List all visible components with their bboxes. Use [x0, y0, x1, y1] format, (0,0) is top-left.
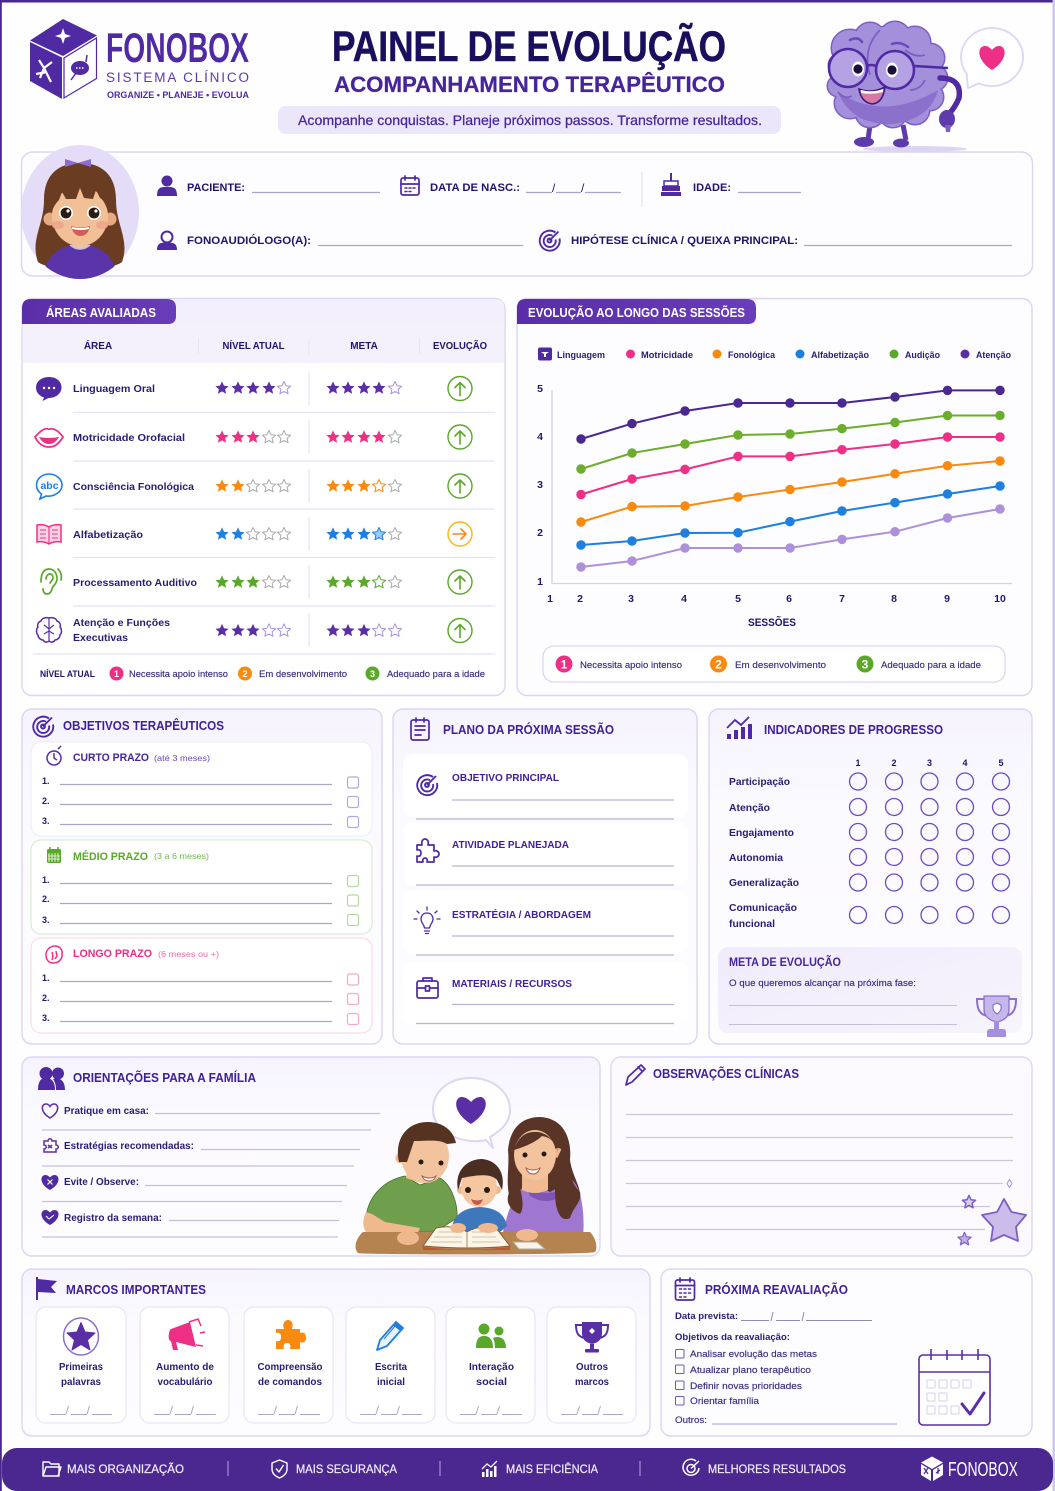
tagline: sistema clínico: SISTEMA CLÍNICO [106, 70, 249, 85]
icon: heart with pulse [41, 1210, 59, 1225]
legend: nível atual [40, 666, 485, 680]
callout: meta de evolução: O que queremos alcançar na próxima fase: [729, 978, 916, 989]
title: PAINEL DE EVOLUÇÃO [332, 23, 726, 71]
chart legend: Audição [905, 350, 940, 361]
row: linguagem oral [36, 376, 472, 401]
card: compreensão de comandos: de comandos [258, 1377, 322, 1388]
tagline pill: Acompanhe conquistas. Planeje próximos passos. Transforme resultados. [298, 112, 762, 128]
item: melhores resultados: MELHORES RESULTADOS [708, 1462, 846, 1476]
rating rows: Participação [729, 776, 790, 788]
card: médio prazo [31, 840, 372, 934]
icon: abc bubble [36, 474, 62, 499]
writing lines [626, 1114, 1013, 1230]
book [423, 1227, 510, 1250]
card: interação social: social [476, 1377, 507, 1388]
line chart: 1 [547, 593, 553, 605]
icon: abc bubble: abc [40, 480, 59, 492]
line chart: 7 [839, 593, 845, 605]
legend: nível atual: Adequado para a idade [387, 669, 485, 680]
card: curto prazo: (até 3 meses) [154, 753, 210, 763]
scale numbers: 4 [962, 758, 968, 768]
icon: calendar with check [919, 1349, 990, 1425]
card: interação social [446, 1307, 535, 1423]
child [452, 1159, 507, 1232]
line chart: 4 [537, 431, 543, 443]
field: data de nascimento: / [552, 181, 556, 195]
logo: Fonobox [30, 19, 250, 100]
series: audição [581, 416, 1000, 469]
chart legend: Alfabetização [811, 350, 869, 361]
checklist: Atualizar plano terapêutico [690, 1365, 811, 1376]
panel: indicadores de progresso [709, 709, 1032, 1044]
heading: ORIENTAÇÕES PARA A FAMÍLIA [73, 1070, 256, 1085]
row: evite / observe: Evite / Observe: [64, 1177, 139, 1188]
card: curto prazo: CURTO PRAZO [73, 752, 149, 764]
icon: brain outline [36, 618, 62, 642]
callout: meta de evolução [718, 947, 1022, 1037]
field: paciente: PACIENTE: [187, 182, 245, 194]
series: alfabetização [581, 486, 1000, 545]
legend box: 2 [715, 658, 722, 672]
panel: patient data [21, 145, 1032, 283]
card: atividade planejada [403, 822, 688, 885]
card: outros marcos: marcos [575, 1377, 609, 1388]
field: data prevista: Data prevista: [675, 1311, 738, 1322]
legend box: 3 [862, 658, 869, 672]
heading: OBSERVAÇÕES CLÍNICAS [653, 1066, 799, 1081]
icon: cake [661, 173, 681, 196]
series: fonológica [581, 461, 1000, 522]
line chart: 3 [628, 593, 634, 605]
table header: META [350, 341, 378, 352]
series: atenção [581, 390, 1000, 439]
line chart: 5 [537, 383, 543, 395]
icon: people [38, 1067, 65, 1090]
panel: plano da próxima sessão [393, 709, 697, 1044]
row: estratégias recomendadas: Estratégias recomendadas: [64, 1141, 194, 1152]
scale numbers: 5 [998, 758, 1004, 768]
footer bar [2, 1448, 1053, 1491]
heading: OBJETIVOS TERAPÊUTICOS [63, 718, 224, 733]
line chart: 9 [944, 593, 950, 605]
icon: ear [41, 569, 61, 594]
tab heading: ÁREAS AVALIADAS [46, 305, 156, 320]
card: objetivo principal [403, 754, 688, 819]
table header: NÍVEL ATUAL [222, 339, 284, 352]
item: mais eficiência: MAIS EFICIÊNCIA [506, 1461, 598, 1476]
checklist: Analisar evolução das metas [690, 1349, 817, 1360]
heading: PLANO DA PRÓXIMA SESSÃO [443, 722, 614, 737]
card: compreensão de comandos: Compreensão [258, 1362, 322, 1373]
father [363, 1122, 457, 1243]
card: longo prazo: 1. [42, 973, 50, 983]
checklist [675, 1332, 897, 1426]
card: materiais [403, 961, 688, 1024]
icon: lips [35, 429, 63, 447]
legend box: 1 [561, 658, 568, 672]
item: mais segurança: MAIS SEGURANÇA [296, 1462, 397, 1476]
card: médio prazo: MÉDIO PRAZO [73, 850, 148, 863]
tab heading: EVOLUÇÃO AO LONGO DAS SESSÕES [528, 305, 745, 320]
line chart: 6 [786, 593, 792, 605]
subtitle: ACOMPANHAMENTO TERAPÊUTICO [334, 72, 725, 97]
mascot: brain with glasses [828, 22, 967, 152]
card: primeiras palavras: palavras [61, 1377, 101, 1388]
panel: áreas avaliadas [22, 298, 505, 696]
card: longo prazo: LONGO PRAZO [73, 948, 152, 960]
line chart: 5 [735, 593, 741, 605]
icon: cube [30, 19, 97, 99]
checklist: Outros: [675, 1415, 707, 1426]
legend box: Adequado para a idade [881, 660, 981, 671]
legend: nível atual: NÍVEL ATUAL [40, 669, 96, 679]
hands and paper [397, 1223, 545, 1249]
card: objetivo principal: OBJETIVO PRINCIPAL [452, 773, 559, 784]
card: interação social: Interação [469, 1362, 514, 1373]
chart legend: Linguagem [557, 350, 605, 361]
card: longo prazo: 3. [42, 1013, 50, 1023]
card: curto prazo: 3. [42, 816, 50, 826]
icon: calendar [401, 176, 419, 195]
icon: clipboard [411, 718, 429, 740]
icon: puzzle [44, 1139, 58, 1152]
row: pratique em casa: Pratique em casa: [64, 1106, 149, 1117]
table header: EVOLUÇÃO [433, 339, 487, 352]
chart legend: Motricidade [641, 350, 693, 361]
slogan: ORGANIZE • PLANEJE • EVOLUA [107, 90, 250, 100]
row: motricidade: Motricidade Orofacial [73, 432, 185, 444]
tab heading [22, 299, 176, 324]
row: consciência fonológica [36, 474, 472, 499]
field: data de nascimento: / [581, 181, 585, 195]
card: longo prazo [31, 938, 372, 1033]
scale numbers: 2 [891, 758, 897, 768]
icon: book [37, 525, 61, 544]
card: médio prazo: (3 a 6 meses) [154, 851, 209, 861]
legend: nível atual: Necessita apoio intenso [129, 669, 228, 680]
icon: target [540, 231, 560, 251]
scale numbers: 3 [927, 758, 932, 768]
panel: próxima reavaliação [661, 1269, 1032, 1436]
card: primeiras palavras [36, 1307, 126, 1423]
panel: objetivos terapêuticos [22, 709, 382, 1044]
row: linguagem oral: Linguagem Oral [73, 383, 155, 395]
chart legend [538, 348, 1011, 361]
tagline pill [278, 106, 781, 134]
card: outros marcos: Outros [576, 1362, 608, 1373]
row: registro da semana [41, 1210, 339, 1237]
card: compreensão de comandos [244, 1307, 333, 1423]
card: escrita inicial: Escrita [375, 1362, 407, 1373]
card: curto prazo: 1. [42, 776, 50, 786]
card: longo prazo: (6 meses ou +) [158, 949, 219, 959]
card: médio prazo: 3. [42, 915, 50, 925]
item: melhores resultados [683, 1459, 846, 1476]
wordmark: FONOBOX [106, 24, 249, 71]
heading: PRÓXIMA REAVALIAÇÃO [705, 1282, 848, 1297]
chart legend: Atenção [976, 350, 1011, 361]
card: aumento de vocabulário: Aumento de [156, 1362, 214, 1373]
icon: therapist [157, 232, 177, 250]
icon: heart outline [42, 1104, 58, 1118]
icon: bars chart [727, 717, 752, 739]
card: médio prazo: 1. [42, 875, 50, 885]
card: materiais: MATERIAIS / RECURSOS [452, 979, 572, 990]
icon: stars [958, 1180, 1026, 1245]
heading: MARCOS IMPORTANTES [66, 1283, 206, 1297]
card: primeiras palavras: Primeiras [59, 1362, 103, 1373]
rating rows: funcional [729, 918, 775, 930]
series: linguagem [581, 509, 1000, 567]
panel: orientações para a família [22, 1057, 600, 1256]
icon: speech [36, 377, 62, 401]
row: motricidade [35, 425, 472, 449]
checklist: Objetivos da reavaliação: [675, 1332, 790, 1343]
checklist: Definir novas prioridades [690, 1381, 802, 1392]
rating rows: Generalização [729, 877, 799, 889]
icon: flag [36, 1277, 57, 1300]
card: atividade planejada: ATIVIDADE PLANEJADA [452, 840, 569, 851]
rating rows [729, 773, 1010, 930]
field: idade [693, 182, 801, 194]
row: alfabetização [37, 522, 472, 546]
scale numbers [855, 758, 1004, 768]
field: idade: IDADE: [693, 182, 731, 194]
icon: calendar [676, 1278, 694, 1300]
row: processamento auditivo: Processamento Auditivo [73, 577, 197, 589]
row: estratégias recomendadas [42, 1139, 360, 1166]
legend: nível atual: Em desenvolvimento [259, 669, 347, 680]
line chart: 3 [537, 479, 543, 491]
icon: trophy [977, 996, 1016, 1037]
legend box: Necessita apoio intenso [580, 660, 682, 671]
table header [84, 338, 487, 354]
card: curto prazo: 2. [42, 796, 50, 806]
legend: nível atual: 3 [370, 669, 375, 679]
field: data de nascimento [430, 181, 621, 195]
legend box [543, 646, 1005, 682]
rating rows: Atenção [729, 802, 770, 814]
card: médio prazo: 2. [42, 894, 50, 904]
avatar: girl [21, 145, 139, 283]
field: fonoaudiólogo: FONOAUDIÓLOGO(A): [187, 234, 311, 247]
mother [503, 1117, 584, 1240]
row: consciência fonológica: Consciência Fonológica [73, 481, 194, 493]
row: atenção e funções executivas: Atenção e Funções [73, 617, 170, 629]
illustration: family reading [356, 1078, 596, 1254]
panel: observações clínicas [611, 1057, 1032, 1256]
rating rows: Comunicação [729, 902, 797, 914]
footer logo: FONOBOX [948, 1459, 1018, 1481]
rating rows: Engajamento [729, 827, 794, 839]
line chart: 4 [681, 593, 687, 605]
card: aumento de vocabulário [140, 1307, 229, 1423]
checklist: Orientar família [690, 1396, 760, 1407]
table [356, 1232, 596, 1254]
line chart: 2 [537, 527, 543, 539]
speech bubble with heart [433, 1078, 510, 1148]
scale numbers: 1 [855, 758, 861, 768]
line chart: 8 [891, 593, 897, 605]
axis title: SESSÕES [748, 616, 796, 629]
icon: target [33, 717, 53, 737]
series: motricidade [581, 437, 1000, 494]
field: data de nascimento: DATA DE NASC.: [430, 182, 520, 194]
status: stable arrow [448, 522, 472, 546]
row: atenção e funções executivas [36, 617, 472, 644]
row: alfabetização: Alfabetização [73, 529, 143, 541]
row: atenção e funções executivas: Executivas [73, 632, 128, 644]
card: estratégia [403, 891, 688, 955]
item: mais organização: MAIS ORGANIZAÇÃO [67, 1462, 184, 1476]
line chart: 2 [577, 593, 583, 605]
row: registro da semana: Registro da semana: [64, 1213, 162, 1224]
panel: marcos importantes [22, 1269, 650, 1436]
line chart [537, 383, 1012, 605]
legend: nível atual: 2 [242, 669, 248, 679]
callout: meta de evolução: META DE EVOLUÇÃO [729, 956, 841, 969]
item: mais segurança [272, 1460, 397, 1478]
card: escrita inicial: inicial [377, 1377, 405, 1388]
card: longo prazo: 2. [42, 993, 50, 1003]
icon: heart with x [41, 1175, 59, 1190]
icon: pencil [626, 1065, 645, 1085]
row: pratique em casa [42, 1104, 380, 1130]
card: outros marcos [547, 1307, 636, 1423]
line chart: 1 [537, 576, 543, 588]
legend: nível atual: 1 [114, 669, 119, 679]
footer logo [921, 1456, 1018, 1481]
rating rows: Autonomia [729, 852, 783, 864]
line chart: 10 [994, 593, 1006, 605]
card: curto prazo [31, 742, 372, 836]
item: mais eficiência [482, 1461, 598, 1477]
heading: INDICADORES DE PROGRESSO [764, 723, 943, 737]
speech bubble with heart [961, 28, 1023, 88]
card: aumento de vocabulário: vocabulário [158, 1377, 212, 1388]
tab heading [517, 299, 756, 324]
row: processamento auditivo [41, 569, 472, 594]
table header: ÁREA [84, 339, 112, 352]
legend box: Em desenvolvimento [735, 660, 826, 671]
row: evite / observe [41, 1175, 347, 1202]
field: data prevista [675, 1311, 872, 1322]
card: estratégia: ESTRATÉGIA / ABORDAGEM [452, 908, 591, 921]
icon: person [157, 176, 177, 196]
panel: evolução ao longo das sessões [517, 298, 1032, 696]
field: hipótese: HIPÓTESE CLÍNICA / QUEIXA PRINCIPAL: [571, 234, 798, 247]
chart legend: Fonológica [728, 350, 776, 361]
card: escrita inicial [346, 1307, 435, 1423]
